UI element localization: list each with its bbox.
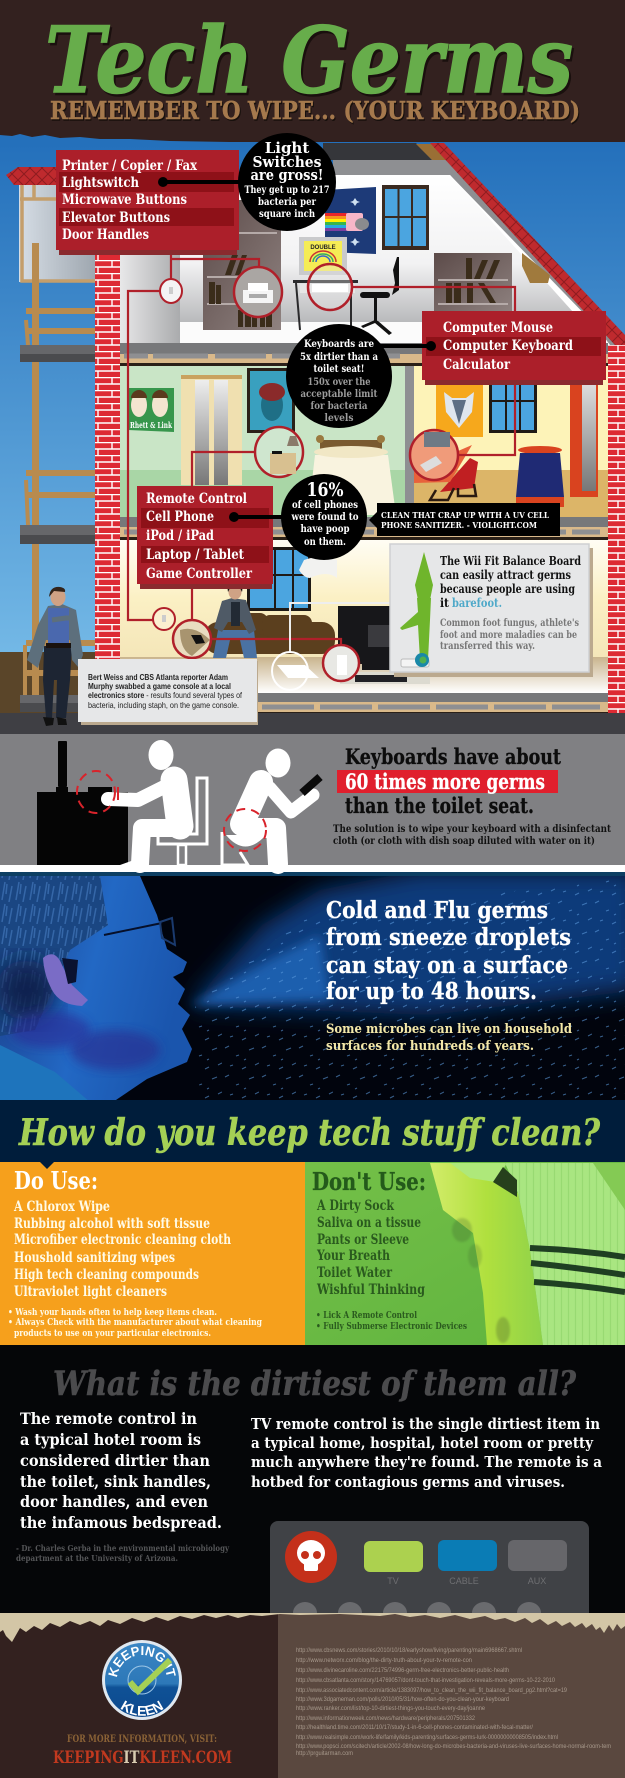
circle: keyboard on desk xyxy=(308,264,352,310)
neck shadow xyxy=(70,1030,160,1070)
red list: computer: Computer Keyboard xyxy=(443,338,573,354)
panel: do use: A Chlorox Wipe xyxy=(13,1199,110,1215)
callout: keyboards: acceptable limit xyxy=(300,389,378,400)
panel: game console swab: Bert Weiss and CBS Atlanta reporter Adam xyxy=(88,672,228,682)
brick walls xyxy=(95,250,625,720)
red list: top left: Elevator Buttons xyxy=(62,210,170,226)
red list: portable devices xyxy=(137,486,273,589)
panel: don't use: Don't Use: xyxy=(312,1167,426,1196)
panel: don't use: • Lick A Remote Control xyxy=(316,1311,417,1321)
rhett and link poster: Rhett & Link xyxy=(130,420,172,430)
torn paper edge xyxy=(0,1613,625,1642)
first floor xyxy=(120,540,608,716)
source links: http://www.3dgameman.com/polls/2010/05/31/how-often-do-you-clean-your-keyboard xyxy=(296,1697,509,1703)
bedroom window xyxy=(489,377,537,433)
ground xyxy=(0,652,100,714)
panel: sneeze droplets xyxy=(0,870,625,1102)
icon: skull button xyxy=(285,1531,337,1583)
source links: http://www.cbsatlanta.com/story/14769057/dont-touch-that-investigation-reveals-more-germs-10-22-2010 xyxy=(296,1678,556,1684)
hair xyxy=(0,876,108,1036)
call to action: KEEPINGITKLEEN.COM xyxy=(53,1748,232,1768)
citation xyxy=(16,1544,230,1564)
pictogram: person on toilet xyxy=(222,748,320,865)
callout: keyboards: 150x over the xyxy=(308,377,370,388)
panel: don't use xyxy=(305,1162,625,1345)
source links: http://www.networx.com/blog/the-dirty-truth-about-your-tv-remote-con xyxy=(296,1658,472,1664)
logo badge xyxy=(102,1640,182,1720)
text: cold and flu: surfaces for hundreds of years. xyxy=(326,1039,534,1054)
panel: don't use: Your Breath xyxy=(316,1248,390,1264)
red list: portable devices: Game Controller xyxy=(146,566,253,582)
source links: http://www.cbsnews.com/stories/2010/10/18/earlyshow/living/parenting/main6968667.shtml xyxy=(296,1648,522,1654)
left quote: the toilet, sink handles, xyxy=(20,1472,211,1491)
source links: http://www.associatedcontent.com/article/1383097/how_to_clean_the_wii_fit_balance_board_pg2.html?cat=19 xyxy=(296,1688,568,1694)
callout: keyboards xyxy=(286,324,436,428)
callout: cell phones: were found to xyxy=(291,511,358,523)
attic window xyxy=(382,185,429,250)
text: cold and flu: for up to 48 hours. xyxy=(326,978,537,1005)
callout: light switches: bacteria per xyxy=(258,197,317,208)
television xyxy=(338,606,430,684)
callout: keyboards: toilet seat! xyxy=(314,364,364,375)
red list: computer: Computer Mouse xyxy=(443,320,553,336)
balcony and stairs xyxy=(6,167,96,712)
source links: http://healthland.time.com/2011/10/17/study-1-in-6-cell-phones-contaminated-with-fecal-matter/ xyxy=(296,1725,533,1731)
text: cold and flu: Cold and Flu germs xyxy=(326,897,548,924)
living room window xyxy=(247,547,311,611)
text: 60 times more germs: than the toilet seat. xyxy=(345,793,534,818)
panel: do use: High tech cleaning compounds xyxy=(14,1267,199,1283)
circle: tablet xyxy=(173,620,211,658)
circle: balance board xyxy=(272,652,319,690)
panel: game console swab: bacteria, including staph, on the game console. xyxy=(88,700,239,710)
red list: top left xyxy=(56,150,239,255)
text: cold and flu: Some microbes can live on household xyxy=(326,1022,572,1037)
panel: don't use: • Fully Submerse Electronic Devices xyxy=(316,1322,467,1332)
sky xyxy=(0,143,625,653)
call to action: FOR MORE INFORMATION, VISIT: xyxy=(67,1733,217,1745)
floor band xyxy=(120,693,608,702)
panel: wii fit balance board: foot and more maladies can be xyxy=(440,630,577,641)
red list: top left: Microwave Buttons xyxy=(62,192,187,208)
red list: portable devices: Remote Control xyxy=(146,491,247,507)
red armchair xyxy=(414,445,478,500)
panel: do use: Do Use: xyxy=(14,1166,98,1195)
footer xyxy=(0,1613,625,1778)
callout: keyboards: for bacteria xyxy=(310,401,368,412)
citation: - Dr. Charles Gerba in the environmental microbiology xyxy=(16,1544,230,1554)
panel: don't use: Pants or Sleeve xyxy=(317,1232,409,1248)
callout: light switches: are gross! xyxy=(250,166,324,184)
left quote: the infamous bedspread. xyxy=(20,1513,222,1532)
source links: http://prguitarman.com xyxy=(296,1751,353,1757)
attic floor beam xyxy=(120,343,608,354)
left quote: a typical hotel room is xyxy=(20,1430,201,1449)
rhett and link poster xyxy=(128,388,174,432)
callout: cell phones xyxy=(229,474,367,560)
circle: computer desk xyxy=(410,430,458,480)
right text: hotbed for contagious germs and viruses. xyxy=(251,1474,565,1491)
panel: game console swab xyxy=(78,659,258,725)
nyan cat poster xyxy=(325,187,376,254)
remote control illustration xyxy=(270,1521,589,1613)
icon: yoga figure xyxy=(400,552,433,660)
source links: http://www.informationweek.com/news/hardware/peripherals/207501332 xyxy=(296,1716,476,1722)
callout: light switches: Light xyxy=(265,139,309,157)
aux button: AUX xyxy=(528,1576,546,1586)
call to action xyxy=(53,1733,232,1768)
callout: uv sanitizer: PHONE SANITIZER. - VIOLIGHT.COM xyxy=(381,521,538,531)
panel: wii fit balance board: Common foot fungus, athlete's xyxy=(440,618,579,629)
panel: do use: Houshold sanitizing wipes xyxy=(14,1250,175,1266)
text: cold and flu xyxy=(326,897,572,1054)
callout: cell phones: on them. xyxy=(304,536,346,548)
panel: what is the dirtiest xyxy=(0,1345,625,1613)
text: cold and flu: from sneeze droplets xyxy=(326,924,571,951)
callout: keyboards: levels xyxy=(324,413,354,424)
panel: do use: Rubbing alcohol with soft tissue xyxy=(14,1216,210,1232)
callout: cell phones: have poop xyxy=(300,523,350,535)
panel: wii fit balance board: The Wii Fit Balance Board xyxy=(440,554,581,568)
tv button xyxy=(364,1541,423,1586)
text: cold and flu: can stay on a surface xyxy=(326,952,568,979)
panel: wii fit balance board: because people are using xyxy=(440,582,575,596)
panel: do use: products to use on your particular electronics. xyxy=(14,1329,211,1339)
red list: portable devices: Laptop / Tablet xyxy=(146,547,244,563)
right bookshelf xyxy=(434,253,512,313)
house scene xyxy=(0,133,625,734)
panel: keyboards vs toilet seat xyxy=(0,734,625,876)
circle: printer xyxy=(234,267,282,317)
icon: balance board xyxy=(401,653,429,667)
panel: do use: Microfiber electronic cleaning cloth xyxy=(14,1232,231,1248)
callout: keyboards: Keyboards are xyxy=(304,339,374,350)
panel: wii fit balance board: transferred this way. xyxy=(440,641,535,652)
wardrobe xyxy=(181,375,242,485)
panel: game console swab: electronics store - results found several types of xyxy=(88,690,243,700)
connector lines xyxy=(128,250,515,645)
cable button: CABLE xyxy=(449,1576,479,1586)
source links: http://www.divinecaroline.com/22175/74996-germ-free-electronics-better-public-health xyxy=(296,1668,509,1674)
source links: http://www.realsimple.com/work-life/family/kids-parenting/surfaces-germs-lurk-00000000008505/index.html xyxy=(296,1735,558,1741)
second floor xyxy=(120,366,608,540)
panel: do use: • Wash your hands often to help keep items clean. xyxy=(8,1308,217,1318)
red list: portable devices: iPod / iPad xyxy=(146,528,214,544)
header band xyxy=(0,0,625,143)
citation: department at the University of Arizona. xyxy=(16,1554,178,1564)
panel: wii fit balance board: it xyxy=(440,596,449,610)
panel: do use: • Always Check with the manufacturer about what cleaning xyxy=(8,1318,263,1328)
callout: light switches: They get up to 217 xyxy=(244,185,330,196)
street band xyxy=(0,713,625,734)
left quote: door handles, and even xyxy=(20,1492,208,1511)
left quote xyxy=(20,1409,222,1532)
red list: computer xyxy=(422,311,606,385)
magnifier circles xyxy=(153,264,458,690)
circle: game console xyxy=(323,645,359,681)
bed xyxy=(308,435,396,515)
walking man xyxy=(27,587,83,726)
callout: uv sanitizer: CLEAN THAT CRAP UP WITH A UV CELL xyxy=(381,511,549,521)
callout: uv sanitizer xyxy=(369,503,560,536)
circle: nightstand phone xyxy=(255,427,303,477)
callout: cell phones: of cell phones xyxy=(292,499,358,511)
logo badge: KLEEN xyxy=(120,1700,164,1716)
callout: light switches: Switches xyxy=(252,153,322,171)
panel: don't use: Wishful Thinking xyxy=(316,1282,425,1298)
left bookshelf xyxy=(203,200,281,330)
desk xyxy=(293,280,358,330)
panel: wii fit balance board xyxy=(390,544,593,677)
circle: upstairs light switch xyxy=(160,279,182,303)
tv button: TV xyxy=(387,1576,399,1586)
pictogram: person at desk xyxy=(37,740,207,865)
dirty sock xyxy=(430,1163,625,1345)
red list: portable devices: Cell Phone xyxy=(146,509,214,525)
chair xyxy=(360,257,399,335)
seated man xyxy=(213,584,257,658)
text: 60 times more germs xyxy=(333,744,611,847)
callout: keyboards: 5x dirtier than a xyxy=(300,352,378,363)
panel: don't use: A Dirty Sock xyxy=(316,1198,395,1214)
logo badge: KEEPING IT xyxy=(108,1646,176,1677)
droplet spray xyxy=(190,870,625,1100)
ear xyxy=(43,954,88,1006)
circle: downstairs light switch xyxy=(153,608,175,630)
red list: top left: Printer / Copier / Fax xyxy=(62,158,198,174)
panel: wii fit balance board: barefoot. xyxy=(452,596,502,610)
panel: don't use: Toilet Water xyxy=(317,1265,393,1281)
couch xyxy=(205,613,335,654)
right text: much anywhere they're found. The remote is a xyxy=(251,1454,603,1471)
curtain xyxy=(570,366,598,497)
callout: cell phones: 16% xyxy=(306,479,344,501)
red list: top left: Lightswitch xyxy=(62,175,139,191)
panel: game console swab: Murphy swabbed a game console at a local xyxy=(88,681,231,691)
roof xyxy=(430,143,625,356)
text: 60 times more germs: Keyboards have about xyxy=(345,744,561,769)
right text: TV remote control is the single dirtiest item in xyxy=(251,1416,600,1433)
text: 60 times more germs: 60 times more germs xyxy=(345,769,545,794)
panel: do use xyxy=(0,1162,305,1345)
glasses xyxy=(104,923,162,935)
panel: do use: Ultraviolet light cleaners xyxy=(14,1284,167,1300)
cable button xyxy=(438,1540,497,1586)
panel: wii fit balance board: can easily attract germs xyxy=(440,568,571,582)
left quote: considered dirtier than xyxy=(20,1451,210,1470)
stool xyxy=(516,446,564,507)
attic xyxy=(120,143,625,366)
panel: how do you keep tech stuff clean xyxy=(0,1100,625,1345)
red list: top left: Door Handles xyxy=(62,227,149,243)
portrait xyxy=(247,368,295,433)
callout: light switches xyxy=(158,133,336,231)
right text xyxy=(251,1416,603,1491)
aux button xyxy=(508,1540,567,1586)
computer monitor xyxy=(299,237,347,275)
left quote: The remote control in xyxy=(20,1409,197,1428)
source links xyxy=(296,1648,611,1757)
computer monitor: DOUBLE xyxy=(310,245,336,251)
wolf poster xyxy=(436,385,483,437)
ceiling lamp xyxy=(299,557,337,578)
floor band xyxy=(120,517,608,527)
collar xyxy=(0,1045,90,1102)
red list: computer: Calculator xyxy=(443,357,511,373)
callout: light switches: square inch xyxy=(259,209,316,220)
right text: a typical home, hospital, hotel room or pretty xyxy=(251,1435,594,1452)
panel: don't use: Saliva on a tissue xyxy=(317,1215,421,1231)
source links: http://www.ranker.com/list/top-10-dirtiest-things-you-touch-every-day/joanne xyxy=(296,1706,486,1712)
sneezing face xyxy=(0,876,192,1102)
